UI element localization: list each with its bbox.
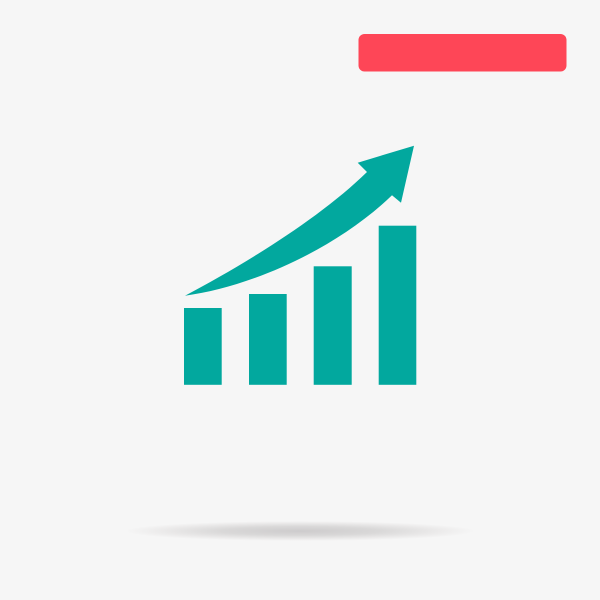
bar 4 [379,226,416,385]
bar 3 [314,266,352,385]
rising arrow [185,146,414,296]
ground shadow [125,521,475,541]
bar chart [184,226,416,385]
bar 2 [249,294,287,385]
bar 1 [184,308,222,385]
red label bar [358,34,566,72]
